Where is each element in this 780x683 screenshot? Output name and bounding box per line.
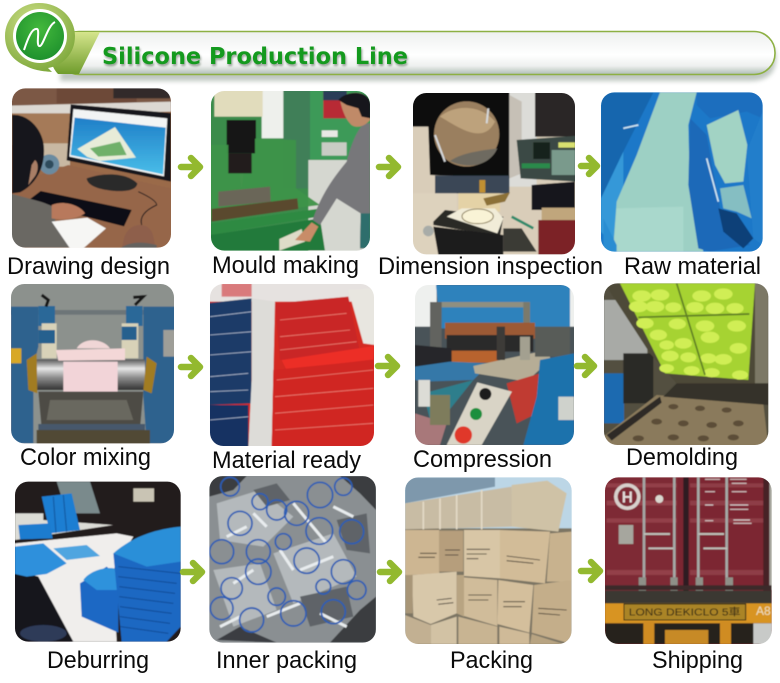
- label: Deburring: [47, 647, 149, 674]
- step 9: deburring: [13, 480, 183, 674]
- label: Packing: [450, 647, 533, 674]
- step 4: raw material: [598, 90, 765, 280]
- step 11: packing: [403, 475, 573, 674]
- photo: shipping container on truck: [603, 475, 773, 647]
- photo: vulcanizing press: [413, 283, 577, 447]
- label: Compression: [413, 446, 552, 473]
- photo: profile projector: [410, 90, 578, 257]
- step 12: shipping: [603, 475, 773, 674]
- step 1: drawing design: [7, 85, 173, 280]
- step 3: dimension inspection: [378, 90, 603, 280]
- photo: blue parts on workbench: [13, 480, 183, 643]
- label: Color mixing: [20, 444, 151, 471]
- label: Shipping: [652, 647, 743, 674]
- label: Material ready: [212, 447, 361, 474]
- label: Inner packing: [216, 647, 357, 674]
- photo: two-roll mill: [8, 282, 177, 445]
- photo: silicone raw material in blue bags: [598, 90, 765, 255]
- label: Dimension inspection: [378, 253, 603, 280]
- photo: stacked cartons: [403, 475, 573, 647]
- arrow 1: [181, 158, 200, 176]
- step 6: material ready: [207, 282, 377, 474]
- photo: red and navy sheets in plastic: [207, 282, 377, 448]
- arrow 8: [380, 563, 399, 581]
- label: Demolding: [626, 444, 738, 471]
- step 7: compression: [413, 283, 577, 473]
- photo: bagged blue rings: [207, 473, 378, 645]
- step 10: inner packing: [207, 473, 378, 674]
- photo: shipping container on truck: H: [622, 489, 633, 506]
- step 5: color mixing: [8, 282, 177, 471]
- arrow 9: [581, 562, 600, 580]
- arrow 6: [577, 357, 594, 375]
- arrow 3: [581, 158, 597, 174]
- step 8: demolding: [602, 282, 770, 471]
- label: Mould making: [212, 252, 359, 279]
- header banner: [5, 3, 776, 81]
- banner title: Silicone Production Line: [102, 44, 408, 70]
- arrow 2: [379, 158, 398, 176]
- photo: designer at computer: [10, 85, 173, 252]
- photo: shipping container on truck: LONG DEKICLO 5車: [629, 606, 741, 619]
- photo: mould machine: [208, 88, 373, 253]
- logo badge: [5, 3, 75, 72]
- arrow 4: [181, 358, 200, 376]
- photo: shipping container on truck: A8: [756, 604, 771, 618]
- label: Drawing design: [7, 253, 170, 280]
- photo: opened mould with lime parts: [602, 282, 770, 447]
- arrow 5: [378, 357, 397, 375]
- label: Raw material: [624, 253, 761, 280]
- arrow 7: [183, 563, 202, 581]
- banner green tab: [50, 32, 100, 74]
- step 2: mould making: [208, 88, 373, 279]
